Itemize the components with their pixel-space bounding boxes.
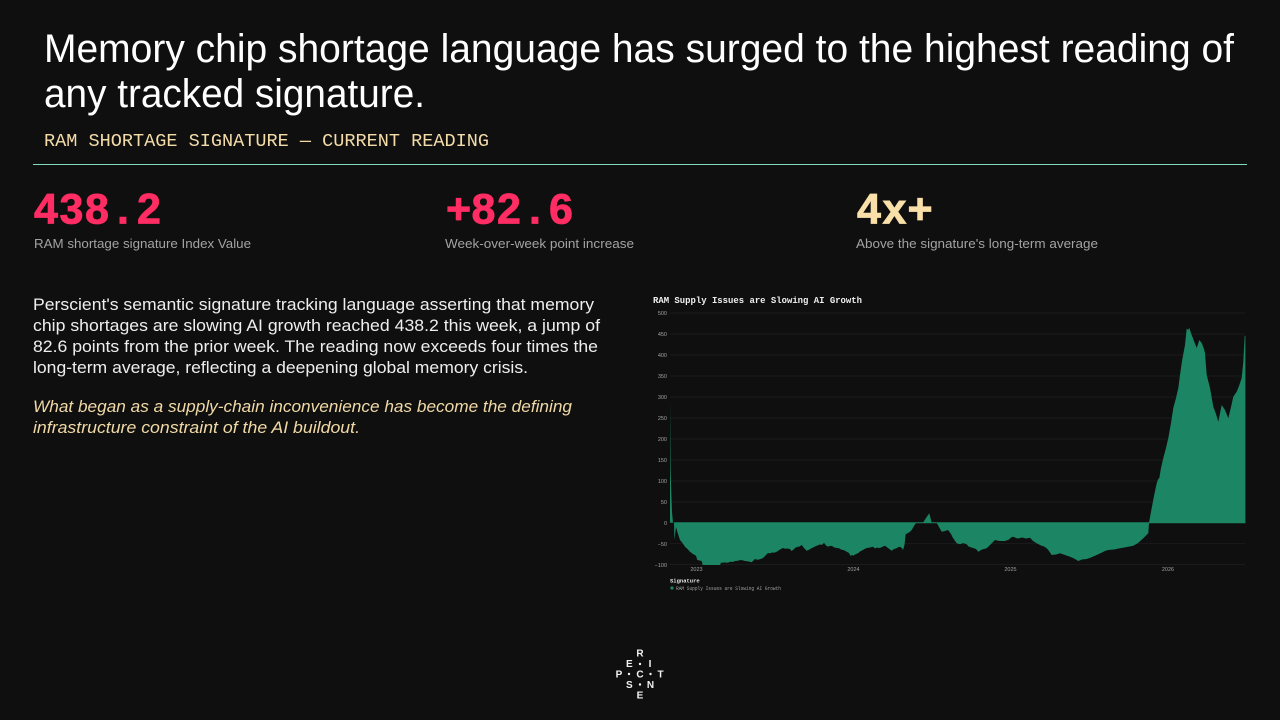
logo: T	[657, 670, 664, 680]
y axis labels	[655, 311, 667, 569]
logo: R	[636, 648, 644, 660]
logo	[616, 648, 664, 702]
y axis labels: 50	[661, 500, 667, 506]
y axis labels: −100	[655, 563, 667, 569]
y axis labels: 500	[658, 311, 667, 317]
y axis labels: 400	[658, 353, 667, 359]
logo: I	[649, 659, 652, 670]
legend: Signature	[670, 578, 700, 584]
stat: weekly increase	[445, 186, 634, 251]
body text: chip shortages are slowing AI growth reached 438.2 this week, a jump of	[33, 317, 600, 335]
x axis labels: 2024	[847, 567, 860, 573]
stat: above average: 4x+	[857, 186, 933, 234]
stat: above average	[856, 186, 1098, 251]
legend	[670, 578, 781, 592]
stat: index value	[34, 186, 251, 251]
logo: C	[636, 670, 644, 680]
y axis labels: 0	[664, 521, 667, 527]
stat: index value: 438.2	[34, 186, 161, 234]
y axis labels: 200	[658, 437, 667, 443]
stat: above average: Above the signature's long-term average	[856, 237, 1098, 251]
x axis labels	[690, 567, 1174, 573]
italic takeaway: infrastructure constraint of the AI buildout.	[33, 419, 360, 437]
body text	[33, 296, 600, 377]
x axis labels: 2025	[1004, 567, 1017, 573]
body text: 82.6 points from the prior week. The reading now exceeds four times the	[33, 338, 598, 356]
y axis labels: 450	[658, 332, 667, 338]
zero line	[674, 522, 1245, 524]
title: Memory chip shortage language has surged to the highest reading of	[44, 27, 1235, 71]
y axis labels: 350	[658, 374, 667, 380]
data area	[670, 328, 1245, 565]
y axis labels: 100	[658, 479, 667, 485]
subtitle: RAM SHORTAGE SIGNATURE — CURRENT READING	[44, 131, 489, 152]
legend: RAM Supply Issues are Slowing AI Growth	[676, 585, 781, 592]
italic takeaway	[33, 398, 573, 437]
x axis labels: 2023	[690, 567, 703, 573]
logo: E	[637, 690, 644, 702]
y axis labels: −50	[658, 542, 667, 548]
body text: Perscient's semantic signature tracking language asserting that memory	[33, 296, 595, 314]
chart title: RAM Supply Issues are Slowing AI Growth	[653, 295, 862, 306]
logo: P	[616, 670, 623, 680]
title	[44, 27, 1235, 116]
area chart	[653, 295, 1245, 592]
logo: S	[626, 680, 633, 691]
x axis labels: 2026	[1162, 567, 1174, 573]
title: any tracked signature.	[44, 72, 425, 116]
stat: index value: RAM shortage signature Index Value	[34, 237, 251, 251]
body text: long-term average, reflecting a deepening global memory crisis.	[33, 359, 528, 377]
stat: weekly increase: Week-over-week point increase	[445, 237, 634, 251]
italic takeaway: What began as a supply-chain inconvenience has become the defining	[33, 398, 573, 416]
y axis labels: 300	[658, 395, 667, 401]
stat: weekly increase: +82.6	[446, 186, 573, 234]
y axis labels: 250	[658, 416, 667, 422]
logo: E	[626, 659, 633, 670]
y axis labels: 150	[658, 458, 667, 464]
logo: N	[647, 680, 654, 691]
